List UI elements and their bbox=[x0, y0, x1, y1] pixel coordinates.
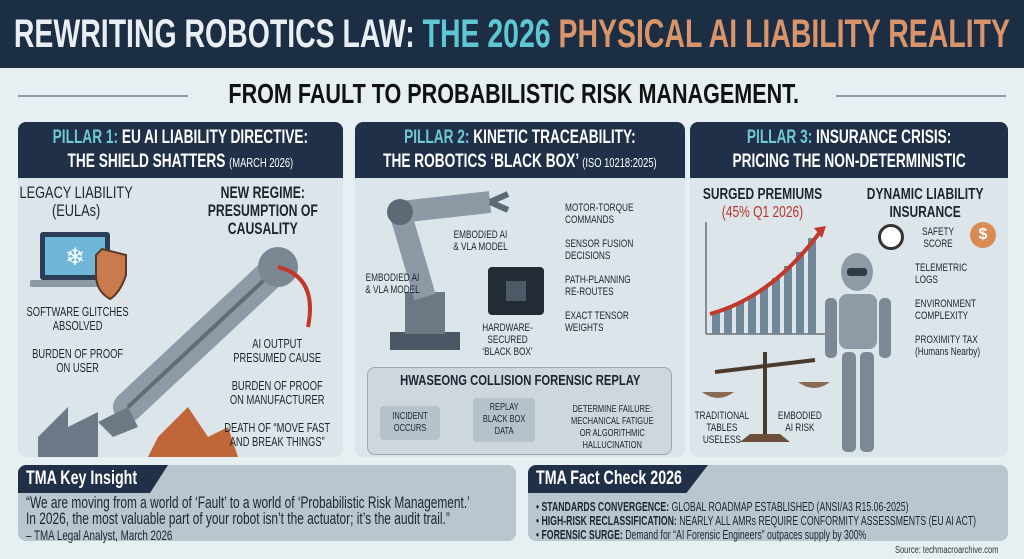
new regime text: AI OUTPUT bbox=[252, 336, 302, 351]
label embodied AI left bbox=[365, 272, 420, 296]
facts list: • HIGH-RISK RECLASSIFICATION: NEARLY ALL AMRs REQUIRE CONFORMITY ASSESSMENTS (EU AI ACT) bbox=[536, 513, 976, 528]
bar chart bbox=[706, 222, 826, 334]
legacy text: BURDEN OF PROOF bbox=[32, 346, 123, 361]
forensic replay box: REPLAY bbox=[490, 402, 519, 413]
scale labels: TABLES bbox=[706, 422, 737, 434]
facts list: • STANDARDS CONVERGENCE: GLOBAL ROADMAP ESTABLISHED (ANSI/A3 R15.06-2025) bbox=[536, 499, 909, 514]
new regime text bbox=[224, 336, 330, 449]
forensic replay box: OCCURS bbox=[394, 423, 426, 434]
dynamic liability label bbox=[867, 186, 984, 221]
label embodied AI top: EMBODIED AI bbox=[454, 229, 507, 241]
embodied risk label: EMBODIED bbox=[778, 410, 822, 422]
data list: DECISIONS bbox=[565, 250, 610, 262]
telemetry factors bbox=[915, 262, 980, 358]
pillar 2 heading: PILLAR 2: KINETIC TRACEABILITY: bbox=[404, 127, 636, 148]
scale labels bbox=[694, 410, 749, 446]
telemetry factors: COMPLEXITY bbox=[915, 310, 968, 322]
title: REWRITING ROBOTICS LAW: THE 2026 PHYSICAL AI LIABILITY REALITY bbox=[14, 12, 1010, 56]
pillar 1 heading: THE SHIELD SHATTERS (MARCH 2026) bbox=[68, 151, 293, 172]
telemetry factors: LOGS bbox=[915, 274, 938, 286]
new regime text: DEATH OF “MOVE FAST bbox=[224, 420, 330, 435]
icon: dollar coin bbox=[970, 222, 996, 248]
legacy liability label: (EULAs) bbox=[52, 201, 100, 220]
pillar 2 heading bbox=[355, 122, 685, 178]
icon: dollar coin: $ bbox=[979, 226, 987, 243]
legacy text: ON USER bbox=[56, 360, 99, 375]
pillar 2 heading: THE ROBOTICS ‘BLACK BOX’ (ISO 10218:2025) bbox=[383, 151, 657, 172]
legacy text: ABSOLVED bbox=[53, 318, 102, 333]
surged premiums label: SURGED PREMIUMS bbox=[703, 186, 822, 203]
forensic replay box: OR ALGORITHMIC bbox=[580, 428, 645, 439]
forensic replay box: DATA bbox=[495, 426, 514, 437]
scale labels: TRADITIONAL bbox=[695, 410, 749, 422]
embodied risk label bbox=[778, 410, 822, 434]
pillar 3 heading: PRICING THE NON-DETERMINISTIC bbox=[732, 151, 966, 172]
new regime label: PRESUMPTION OF bbox=[208, 201, 318, 220]
safety score label: SAFETY bbox=[922, 226, 954, 238]
label black box: SECURED bbox=[487, 334, 528, 346]
data list: COMMANDS bbox=[565, 214, 614, 226]
tag: fact check: TMA Fact Check 2026 bbox=[536, 468, 682, 489]
data list: PATH-PLANNING bbox=[565, 274, 631, 286]
telemetry factors: (Humans Nearby) bbox=[915, 346, 980, 358]
data list: WEIGHTS bbox=[565, 322, 604, 334]
source: Source: techmacroarchive.com bbox=[895, 545, 998, 556]
facts list: • FORENSIC SURGE: Demand for “AI Forensic Engineers” outpaces supply by 300% bbox=[536, 527, 866, 542]
data list: RE-ROUTES bbox=[565, 286, 614, 298]
icon: scales bbox=[702, 352, 830, 442]
panel: pillar 1 bbox=[18, 122, 343, 457]
embodied risk label: AI RISK bbox=[785, 422, 815, 434]
pillar 1 heading: PILLAR 1: EU AI LIABILITY DIRECTIVE: bbox=[53, 127, 308, 148]
quote: In 2026, the most valuable part of your robot isn’t the actuator; it’s the audit trail.” bbox=[26, 509, 450, 528]
facts list bbox=[536, 499, 976, 542]
icon: safety score bbox=[878, 224, 904, 250]
safety score label bbox=[922, 226, 954, 250]
legacy text bbox=[27, 304, 129, 375]
telemetry factors: TELEMETRIC bbox=[915, 262, 967, 274]
dynamic liability label: DYNAMIC LIABILITY bbox=[867, 186, 983, 203]
pillar 1 heading bbox=[18, 122, 343, 178]
new regime text: BURDEN OF PROOF bbox=[232, 378, 323, 393]
forensic replay box: INCIDENT bbox=[392, 411, 428, 422]
label black box bbox=[482, 322, 533, 358]
data list: SENSOR FUSION bbox=[565, 238, 633, 250]
tag: key insight bbox=[18, 465, 168, 493]
label embodied AI top bbox=[453, 229, 508, 253]
surged premiums label bbox=[703, 186, 822, 221]
icon: laptop with shield bbox=[30, 232, 127, 300]
safety score label: SCORE bbox=[923, 238, 953, 250]
dynamic liability label: INSURANCE bbox=[889, 204, 961, 221]
tag: fact check bbox=[528, 465, 708, 493]
surged premiums label: (45% Q1 2026) bbox=[722, 204, 803, 221]
quote: “We are moving from a world of ‘Fault’ to a world of ‘Probabilistic Risk Management.’ bbox=[26, 493, 470, 512]
panel: pillar 3 bbox=[690, 122, 1008, 457]
new regime label bbox=[208, 183, 318, 238]
telemetry factors: PROXIMITY TAX bbox=[915, 334, 978, 346]
panel: pillar 2 bbox=[355, 122, 685, 457]
label black box: HARDWARE- bbox=[482, 322, 533, 334]
subtitle: FROM FAULT TO PROBABILISTIC RISK MANAGEMENT. bbox=[228, 78, 799, 109]
icon: robot arm with black box bbox=[387, 191, 544, 350]
icon: robot arm breaking bbox=[38, 247, 312, 457]
pillar 3 heading: PILLAR 3: INSURANCE CRISIS: bbox=[747, 127, 951, 148]
legacy liability label bbox=[20, 183, 133, 220]
label embodied AI top: & VLA MODEL bbox=[453, 241, 508, 253]
key insight box bbox=[18, 465, 516, 541]
label embodied AI left: & VLA MODEL bbox=[365, 284, 420, 296]
quote: – TMA Legal Analyst, March 2026 bbox=[26, 527, 172, 543]
fact check box bbox=[528, 465, 1008, 541]
title bbox=[0, 0, 1024, 68]
legacy liability label: LEGACY LIABILITY bbox=[20, 183, 133, 202]
data list: EXACT TENSOR bbox=[565, 310, 629, 322]
new regime label: NEW REGIME: bbox=[221, 183, 305, 202]
forensic replay box bbox=[367, 367, 672, 455]
scale labels: USELESS bbox=[703, 434, 741, 446]
forensic replay box: HWASEONG COLLISION FORENSIC REPLAY bbox=[400, 372, 640, 389]
forensic replay box: MECHANICAL FATIGUE bbox=[571, 416, 654, 427]
forensic replay box: BLACK BOX bbox=[483, 414, 525, 425]
tag: key insight: TMA Key Insight bbox=[26, 468, 137, 489]
forensic replay box: HALLUCINATION bbox=[583, 440, 642, 451]
telemetry factors: ENVIRONMENT bbox=[915, 298, 976, 310]
legacy text: SOFTWARE GLITCHES bbox=[27, 304, 129, 319]
icon: laptop with shield: ❄ bbox=[65, 244, 85, 271]
new regime text: AND BREAK THINGS” bbox=[230, 434, 325, 449]
forensic replay box: DETERMINE FAILURE: bbox=[572, 404, 652, 415]
label black box: ‘BLACK BOX’ bbox=[482, 346, 533, 358]
robot figure bbox=[825, 253, 891, 452]
new regime text: PRESUMED CAUSE bbox=[233, 350, 321, 365]
quote bbox=[26, 493, 470, 543]
data list bbox=[565, 202, 634, 334]
new regime label: CAUSALITY bbox=[228, 219, 298, 238]
pillar 3 heading bbox=[690, 122, 1008, 178]
label embodied AI left: EMBODIED AI bbox=[366, 272, 419, 284]
new regime text: ON MANUFACTURER bbox=[230, 392, 325, 407]
data list: MOTOR-TORQUE bbox=[565, 202, 633, 214]
